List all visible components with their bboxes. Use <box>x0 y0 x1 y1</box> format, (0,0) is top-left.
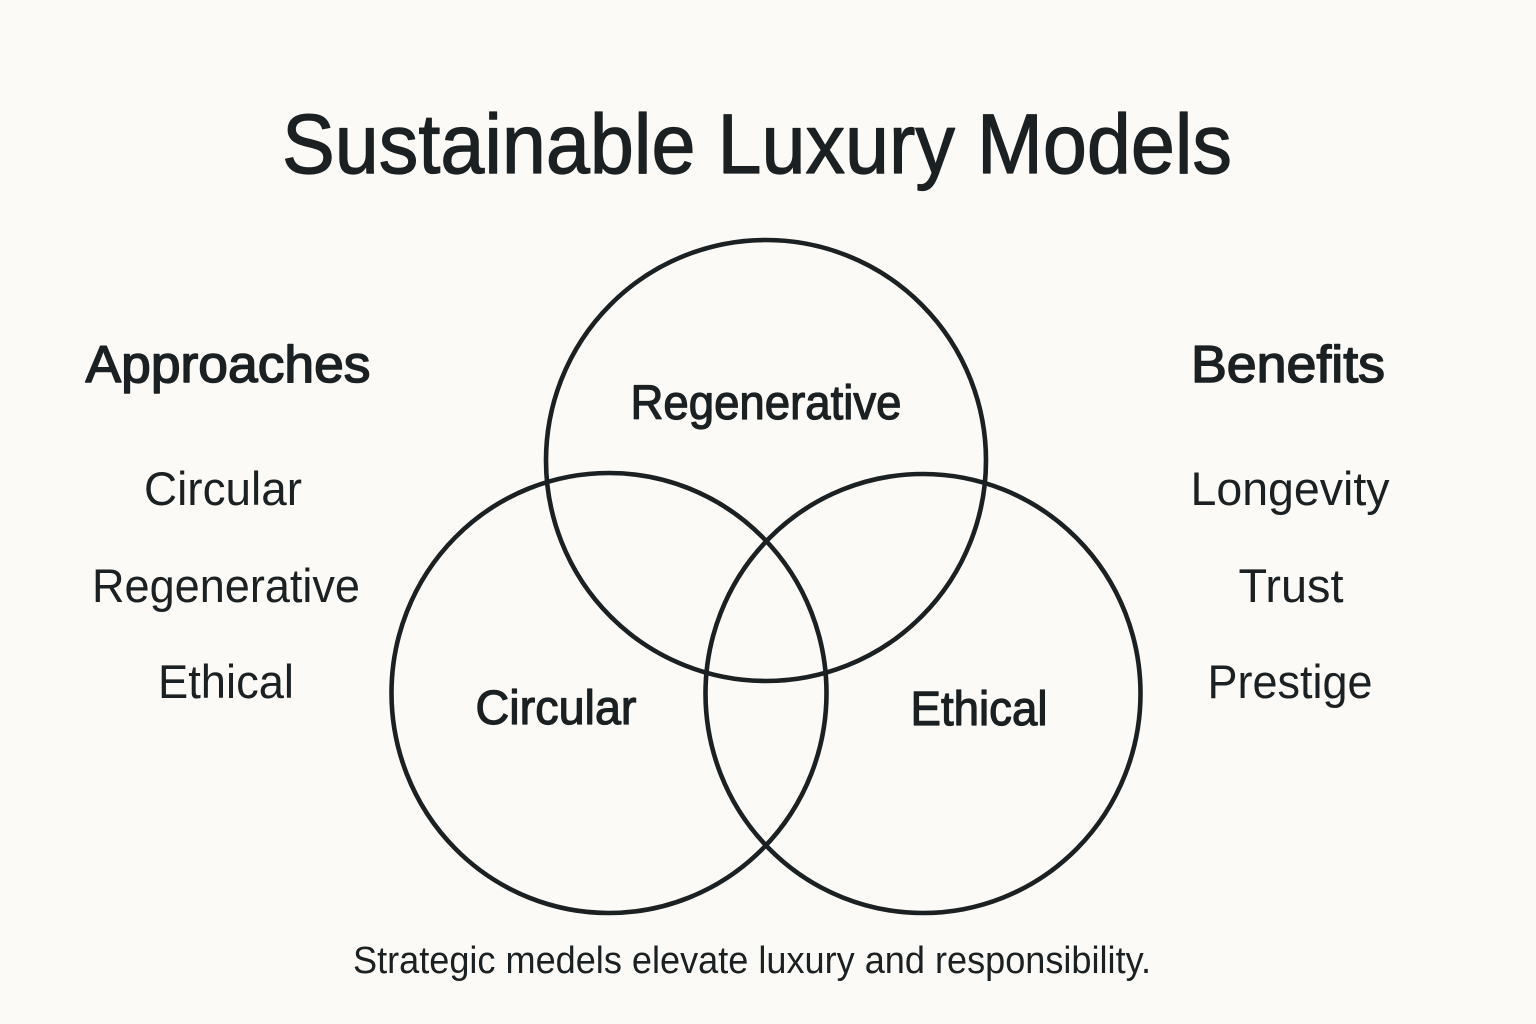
label: ethical: Ethical <box>910 683 1048 736</box>
circle: regenerative <box>546 240 986 681</box>
heading: benefits: Benefits <box>1191 336 1385 394</box>
circle: ethical <box>706 474 1140 913</box>
panel: approaches <box>86 336 370 708</box>
circle: circular <box>392 473 826 913</box>
benefit: trust: Trust <box>1238 559 1344 612</box>
heading: approaches: Approaches <box>86 336 370 394</box>
approach: circular: Circular <box>144 462 302 515</box>
benefit: longevity: Longevity <box>1190 462 1390 515</box>
approach: ethical: Ethical <box>158 655 294 708</box>
benefit: prestige: Prestige <box>1208 655 1372 708</box>
label: circular: Circular <box>476 682 637 735</box>
panel: benefits <box>1190 336 1390 708</box>
approach: regenerative: Regenerative <box>92 559 360 612</box>
caption: Strategic medels elevate luxury and responsibility. <box>353 940 1151 982</box>
title: Sustainable Luxury Models <box>282 97 1232 191</box>
label: regenerative: Regenerative <box>630 377 902 430</box>
venn diagram <box>392 240 1140 913</box>
